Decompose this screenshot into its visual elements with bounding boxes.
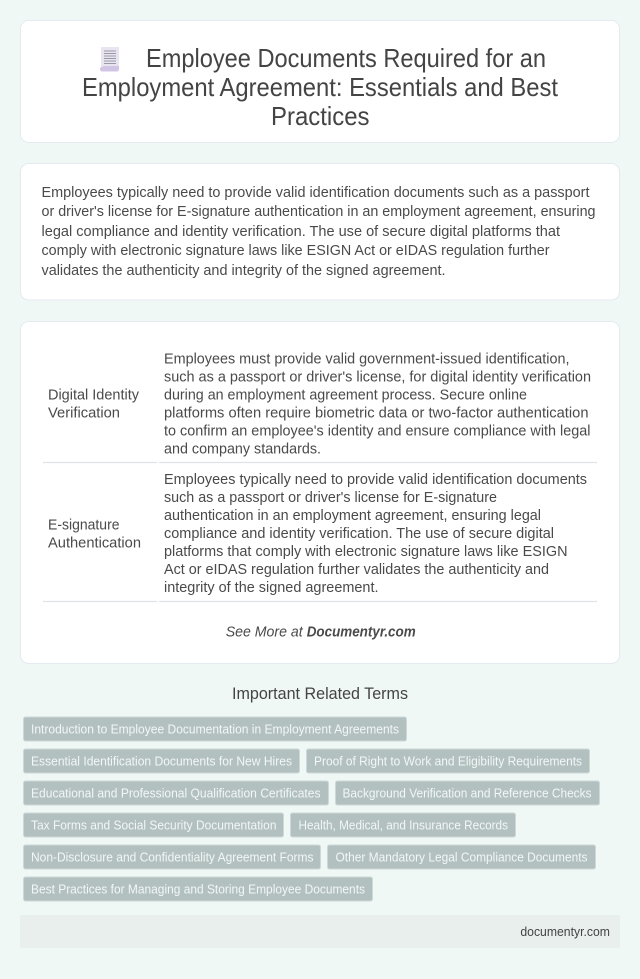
see more link [226,625,416,641]
chip: Essential Identification Documents for New Hires [31,754,292,768]
row label [48,387,140,421]
chip [290,813,516,837]
chip [336,781,600,805]
title: Employee Documents Required for an [146,43,546,73]
text block: introduction: Employees typically need to provide valid identification documents such as a passport [42,185,590,201]
row label: Digital Identity [48,387,140,403]
panel: title card [20,20,620,142]
row description: and company standards. [164,442,321,458]
row description: to confirm an employee's identity and ensure compliance with legal [164,424,590,440]
heading: important related terms: Important Related Terms [232,684,408,703]
row description: during an employment agreement process. Secure online [164,388,527,404]
chip: Introduction to Employee Documentation in Employment Agreements [31,722,399,736]
see more link: See More at [226,625,304,641]
text block: introduction: or driver's license for E-signature authentication in an employment agreement, ensuring [42,204,596,220]
title: Practices [271,101,370,131]
chip [24,717,406,741]
chip: Health, Medical, and Insurance Records [298,818,508,832]
chip: Background Verification and Reference Checks [342,786,592,800]
row label: E-signature [48,517,120,533]
icon: receipt document [100,47,119,72]
row description [164,472,587,596]
row description: compliance and identity verification. The use of secure digital [164,526,554,542]
chip [306,749,590,773]
text block: introduction [42,185,596,279]
row description: Employees must provide valid government-issued identification, [164,352,570,368]
chip [24,749,300,773]
chip: Tax Forms and Social Security Documentation [31,818,276,832]
title [82,43,559,131]
title: Employment Agreement: Essentials and Best [82,72,559,102]
panel: introduction text [20,164,620,300]
footer [20,915,620,948]
see more link: Documentyr.com [307,625,416,641]
row description [164,352,591,458]
chip: Non-Disclosure and Confidentiality Agreement Forms [31,850,314,864]
row label: Authentication [48,535,141,551]
chip: Other Mandatory Legal Compliance Documents [336,850,588,864]
chip [24,813,284,837]
row description: integrity of the signed agreement. [164,580,378,596]
text block: introduction: legal compliance and identity verification. The use of secure digital platforms that [42,224,560,240]
footer: documentyr.com [520,924,610,939]
chip [24,845,320,869]
chip: Proof of Right to Work and Eligibility Requirements [314,754,582,768]
row label [48,517,141,551]
text block: introduction: validates the authenticity and integrity of the signed agreement. [42,263,446,279]
table row: Digital Identity Verification [48,352,591,458]
panel: terms table [20,322,620,664]
related terms chips [24,717,600,901]
row description: platforms often require biometric data or two-factor authentication [164,406,588,422]
row description: platforms that comply with electronic signature laws like ESIGN [164,544,568,560]
row description: Employees typically need to provide valid identification documents [164,472,587,488]
row description: authentication in an employment agreement, ensuring legal [164,508,541,524]
row description: such as a passport or driver's license for E-signature [164,490,497,506]
chip [24,781,328,805]
row label: Verification [48,405,120,421]
table row: E-signature Authentication [48,472,587,596]
chip: Educational and Professional Qualification Certificates [31,786,321,800]
chip [328,845,596,869]
chip: Best Practices for Managing and Storing Employee Documents [31,882,365,896]
chip [24,877,372,901]
text block: introduction: comply with electronic signature laws like ESIGN Act or eIDAS regulation further [42,243,550,259]
row description: Act or eIDAS regulation further validates the authenticity and [164,562,549,578]
row description: such as a passport or driver's license, for digital identity verification [164,370,591,386]
